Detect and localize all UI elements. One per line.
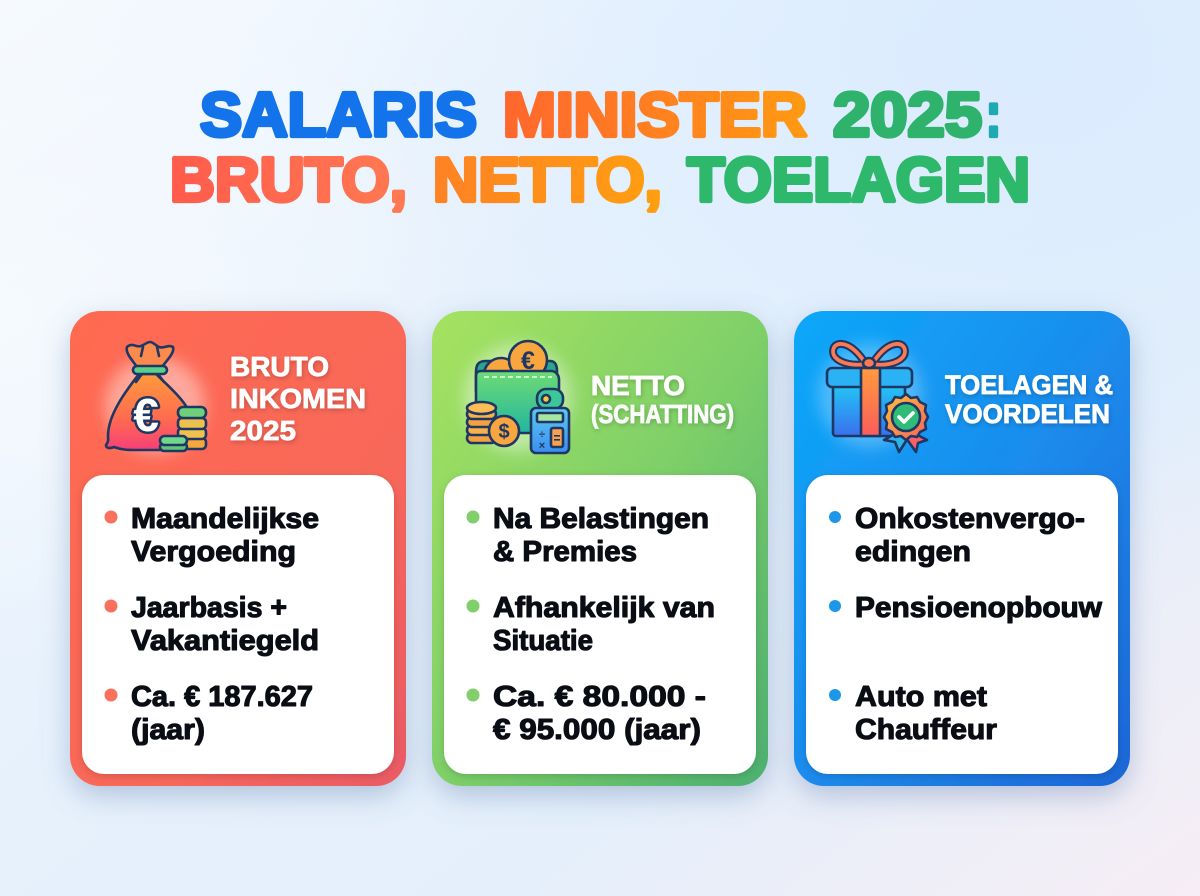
heading: bruto inkomen 2025: INKOMEN xyxy=(230,383,366,414)
bullet: afhankelijk xyxy=(466,592,715,657)
bullet: bedrag: Ca. € 80.000 - xyxy=(493,681,706,713)
bullet: pensioenopbouw: Pensioenopbouw xyxy=(855,592,1103,624)
bullet: afhankelijk: Afhankelijk van xyxy=(493,592,715,624)
icon: wallet with coins and calculator: ÷ xyxy=(539,429,545,441)
bullet: bedrag xyxy=(104,681,313,746)
icon: gift with rosette xyxy=(818,343,928,452)
title: 2025 xyxy=(833,81,982,150)
heading: netto schatting: (SCHATTING) xyxy=(591,399,734,429)
heading: bruto inkomen 2025: BRUTO xyxy=(230,351,329,382)
icon: money bag with coins xyxy=(105,342,206,453)
heading: toelagen en voordelen xyxy=(945,370,1113,429)
bullet: auto met chauffeur: Chauffeur xyxy=(855,714,997,746)
list panel: netto xyxy=(444,475,756,774)
title: TOELAGEN xyxy=(687,146,1030,215)
bullet: na belastingen: & Premies xyxy=(493,536,637,568)
bullet: afhankelijk: Situatie xyxy=(493,625,593,657)
icon: wallet with coins and calculator xyxy=(464,341,572,453)
bullet: bedrag: Ca. € 187.627 xyxy=(131,681,313,713)
bullet: maandelijkse vergoeding xyxy=(104,503,319,568)
title: BRUTO, xyxy=(170,146,407,215)
title: SALARIS xyxy=(200,81,477,150)
bullet: maandelijkse vergoeding: Vergoeding xyxy=(131,536,296,568)
bullet: onkostenvergoedingen: Onkostenvergo- xyxy=(855,503,1085,535)
bullet: bedrag xyxy=(466,681,706,746)
list panel: toelagen xyxy=(806,475,1118,774)
heading: bruto inkomen 2025: 2025 xyxy=(230,415,296,446)
bullet: maandelijkse vergoeding: Maandelijkse xyxy=(131,503,319,535)
bullet: auto met chauffeur: Auto met xyxy=(855,681,988,713)
bullet: onkostenvergoedingen: edingen xyxy=(855,536,971,568)
icon: money bag with coins: € xyxy=(133,389,159,441)
heading: toelagen en voordelen: TOELAGEN & xyxy=(945,370,1113,400)
list panel: bruto xyxy=(82,475,394,774)
icon: wallet with coins and calculator: € xyxy=(521,347,535,375)
title xyxy=(170,81,1030,215)
panel: toelagen en voordelen xyxy=(794,311,1130,786)
bullet: jaarbasis: Jaarbasis + xyxy=(131,592,287,624)
heading: netto schatting xyxy=(591,370,734,429)
bullet: bedrag: (jaar) xyxy=(131,714,205,746)
bullet: na belastingen: Na Belastingen xyxy=(493,503,709,535)
title: NETTO, xyxy=(433,146,662,215)
panel: bruto inkomen xyxy=(70,311,406,786)
bullet: auto met chauffeur xyxy=(829,681,997,746)
heading: bruto inkomen 2025 xyxy=(230,351,366,446)
title: : xyxy=(986,81,1001,150)
bullet: onkostenvergoedingen xyxy=(829,503,1085,568)
bullet: na belastingen xyxy=(466,503,709,568)
heading: netto schatting: NETTO xyxy=(591,370,685,401)
bullet: jaarbasis: Vakantiegeld xyxy=(131,625,319,657)
icon: wallet with coins and calculator: × xyxy=(539,440,545,452)
heading: toelagen en voordelen: VOORDELEN xyxy=(945,399,1110,429)
icon: wallet with coins and calculator: $ xyxy=(498,421,510,443)
bullet: bedrag: € 95.000 (jaar) xyxy=(493,714,701,746)
panel: netto xyxy=(432,311,768,786)
bullet: jaarbasis xyxy=(104,592,319,657)
title: MINISTER xyxy=(503,81,807,150)
